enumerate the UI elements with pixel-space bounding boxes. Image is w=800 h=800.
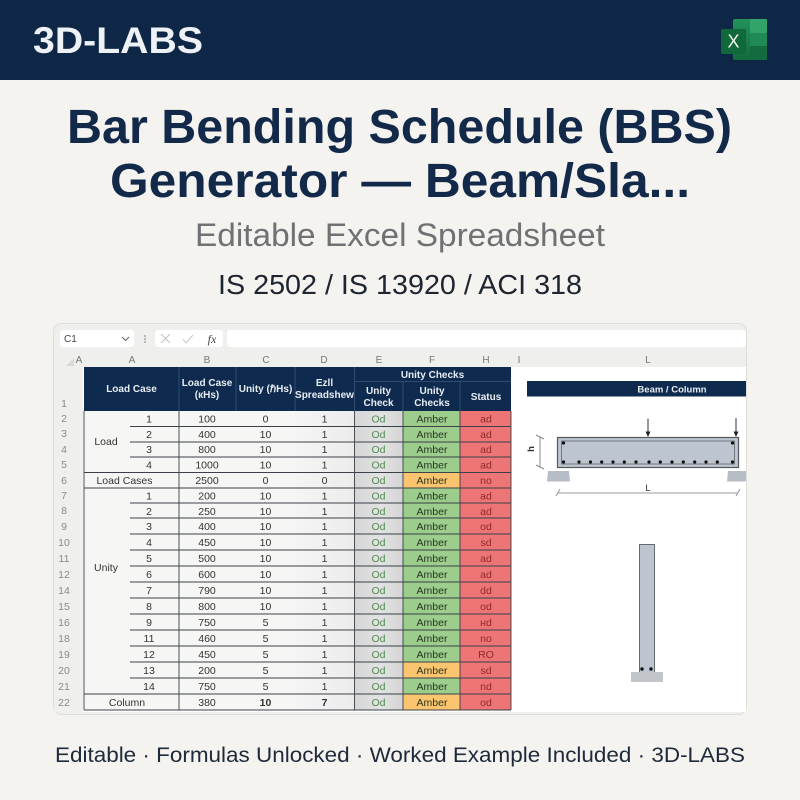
table rows: 1: [322, 633, 328, 645]
row numbers: 11: [59, 553, 70, 565]
table rows: 1: [322, 460, 328, 472]
table rows: Amber: [417, 444, 448, 456]
table rows: 10: [260, 537, 271, 549]
column letters: L: [645, 355, 651, 366]
table rows: Od: [371, 429, 386, 441]
dimension L: [556, 483, 740, 496]
table rows: Amber: [417, 617, 448, 629]
beam diagram: [526, 418, 746, 496]
formula bar: [60, 330, 746, 347]
table rows: Amber: [417, 633, 448, 645]
column letters: A: [129, 355, 136, 366]
table rows: 1: [322, 617, 328, 629]
table rows: 5: [263, 681, 269, 693]
table rows: no: [480, 633, 492, 645]
column letters: I: [518, 355, 520, 366]
table rows: ad: [480, 429, 492, 441]
dimension L: L: [645, 483, 651, 494]
column F: amber fills: [403, 411, 460, 710]
table rows: sd: [480, 537, 492, 549]
column letters: A: [76, 355, 83, 366]
table rows: 0: [263, 414, 269, 426]
table rows: Amber: [417, 681, 448, 693]
formula bar: fx: [208, 332, 217, 346]
table rows: Amber: [417, 665, 448, 677]
table rows: dd: [480, 585, 492, 597]
table rows: Amber: [417, 521, 448, 533]
table rows: od: [480, 697, 492, 709]
table rows: Od: [371, 633, 386, 645]
table rows: 200: [198, 490, 216, 502]
row numbers: 10: [58, 537, 70, 549]
supports: [547, 471, 746, 482]
column diagram: [631, 544, 663, 682]
table rows: ad: [480, 460, 492, 472]
table: [84, 367, 511, 710]
brand logo text: 3D-LABS: [33, 19, 203, 61]
table rows: 10: [260, 601, 271, 613]
icon: Excel logo: X: [727, 32, 740, 52]
table rows: 10: [260, 429, 271, 441]
table rows: 1: [322, 569, 328, 581]
group labels: [94, 436, 119, 574]
standards line: IS 2502 / IS 13920 / ACI 318: [218, 269, 582, 300]
column letters: H: [482, 355, 490, 366]
table rows: Column: [109, 697, 145, 709]
table rows: 450: [198, 537, 216, 549]
table rows: 10: [260, 521, 271, 533]
table rows: Amber: [417, 460, 448, 472]
table rows: 10: [260, 444, 271, 456]
table rows: 3: [146, 521, 152, 533]
subtitle: Editable Excel Spreadsheet: [195, 217, 605, 253]
row numbers: 2: [61, 413, 67, 425]
table rows: Od: [371, 601, 386, 613]
table rows: 1: [322, 429, 328, 441]
column letters: D: [320, 355, 328, 366]
table rows: 2: [146, 506, 152, 518]
table rows: 4: [146, 460, 152, 472]
table rows: 10: [260, 506, 271, 518]
table rows: 7: [322, 697, 328, 709]
table rows: Amber: [417, 649, 448, 661]
row numbers: 5: [61, 459, 67, 471]
table rows: od: [480, 521, 492, 533]
table rows: ad: [480, 444, 492, 456]
column letters: B: [204, 355, 211, 366]
header bar: [0, 0, 800, 80]
table rows: 9: [146, 617, 152, 629]
table rows: ad: [480, 414, 492, 426]
row numbers: [58, 398, 70, 709]
table rows: 250: [198, 506, 216, 518]
table rows: 8: [146, 601, 152, 613]
table rows: 1: [322, 649, 328, 661]
table rows: 0: [322, 475, 328, 487]
table rows: 5: [263, 633, 269, 645]
table rows: Amber: [417, 506, 448, 518]
table header: Unity (ℏHs): [239, 384, 292, 395]
table rows: 450: [198, 649, 216, 661]
icon: Excel logo: [721, 19, 767, 60]
table header: Unity: [420, 386, 445, 397]
table rows: 5: [263, 665, 269, 677]
table header: Load Case: [106, 384, 157, 395]
table rows: 790: [198, 585, 216, 597]
table header: Unity: [366, 386, 391, 397]
table header: (кHs): [195, 390, 219, 401]
table rows: Od: [371, 444, 386, 456]
table rows: 2500: [195, 475, 219, 487]
row numbers: 9: [61, 521, 67, 533]
table rows: Od: [371, 490, 386, 502]
table rows: Od: [371, 617, 386, 629]
table rows: sd: [480, 665, 492, 677]
table rows: 10: [260, 460, 271, 472]
row numbers: 8: [61, 505, 67, 517]
row numbers: 4: [61, 444, 67, 456]
row numbers: 19: [58, 649, 70, 661]
table rows: 800: [198, 601, 216, 613]
table rows: ad: [480, 490, 492, 502]
table rows: 2: [146, 429, 152, 441]
table rows: 1: [322, 490, 328, 502]
table rows: Od: [371, 460, 386, 472]
table rows: 10: [260, 569, 271, 581]
table rows: 10: [260, 585, 271, 597]
row numbers: 20: [58, 665, 70, 677]
table header: Spreadshew: [295, 390, 354, 401]
column letters: C: [262, 355, 270, 366]
footer tagline: Editable · Formulas Unlocked · Worked Example Included · 3D-LABS: [55, 743, 745, 767]
table rows: Load Cases: [96, 475, 153, 487]
beam / column banner: Beam / Column: [637, 384, 707, 396]
table rows: [96, 414, 494, 709]
table rows: Od: [371, 585, 386, 597]
formula bar: C1: [64, 334, 77, 345]
table header: Unity Checks: [401, 370, 465, 381]
table rows: 380: [198, 697, 216, 709]
table rows: 1: [322, 444, 328, 456]
table rows: ad: [480, 569, 492, 581]
beam / column banner: [527, 381, 746, 396]
table rows: 1: [322, 414, 328, 426]
table rows: 750: [198, 617, 216, 629]
title: [67, 101, 732, 208]
table rows: Amber: [417, 553, 448, 565]
table rows: Amber: [417, 601, 448, 613]
table rows: 0: [263, 475, 269, 487]
table rows: Od: [371, 414, 386, 426]
group labels: Load: [94, 436, 118, 448]
table rows: no: [480, 475, 492, 487]
table rows: нd: [480, 617, 492, 629]
row numbers: 22: [58, 697, 70, 709]
title: Generator — Beam/Sla...: [110, 155, 690, 208]
table rows: 1: [322, 601, 328, 613]
table rows: 750: [198, 681, 216, 693]
table rows: 200: [198, 665, 216, 677]
table rows: 6: [146, 569, 152, 581]
table rows: 10: [260, 490, 271, 502]
table rows: 400: [198, 521, 216, 533]
rebar dots: [562, 441, 734, 464]
table rows: Od: [371, 697, 386, 709]
table rows: 1: [322, 585, 328, 597]
table rows: Amber: [417, 569, 448, 581]
table header: [84, 367, 511, 411]
table rows: 1: [322, 681, 328, 693]
column letters: [66, 355, 651, 366]
white sheet area: [75, 367, 746, 712]
table rows: 1: [322, 537, 328, 549]
table rows: 1: [322, 506, 328, 518]
table rows: 800: [198, 444, 216, 456]
table rows: 1: [322, 521, 328, 533]
table rows: Od: [371, 569, 386, 581]
row numbers: 18: [58, 633, 70, 645]
table header: Checks: [414, 398, 450, 409]
table rows: 5: [263, 649, 269, 661]
row numbers: 6: [61, 475, 67, 487]
table rows: 500: [198, 553, 216, 565]
table rows: Od: [371, 553, 386, 565]
table header: Load Case: [182, 378, 233, 389]
table rows: 7: [146, 585, 152, 597]
table header: Status: [471, 392, 502, 403]
table rows: Amber: [417, 490, 448, 502]
beam body: [558, 438, 738, 468]
table rows: 14: [143, 681, 155, 693]
row numbers: 15: [58, 601, 70, 613]
table rows: od: [480, 601, 492, 613]
table rows: Amber: [417, 537, 448, 549]
table rows: ad: [480, 553, 492, 565]
column H: status fills: [460, 411, 511, 710]
row numbers: 12: [58, 569, 70, 581]
table rows: 1000: [195, 460, 219, 472]
table rows: RO: [478, 649, 494, 661]
table rows: Od: [371, 665, 386, 677]
table rows: Od: [371, 649, 386, 661]
grid lines: [84, 411, 511, 710]
table header: Check: [363, 398, 394, 409]
table rows: 1: [146, 490, 152, 502]
table rows: 460: [198, 633, 216, 645]
table rows: Od: [371, 475, 386, 487]
dimension h: h: [526, 446, 537, 452]
table rows: Amber: [417, 585, 448, 597]
table rows: 13: [143, 665, 155, 677]
column letters: F: [429, 355, 435, 366]
panel: spreadsheet window: [54, 324, 746, 714]
row numbers: 7: [61, 490, 67, 502]
group labels: Unity: [94, 562, 119, 574]
table rows: 11: [144, 633, 155, 645]
row numbers: 14: [58, 585, 70, 597]
table rows: ad: [480, 506, 492, 518]
table header: Ezll: [316, 378, 333, 389]
table rows: 10: [260, 553, 271, 565]
table rows: 3: [146, 444, 152, 456]
dimension h: [526, 435, 544, 469]
column letters: E: [376, 355, 383, 366]
table rows: 600: [198, 569, 216, 581]
table rows: Amber: [417, 429, 448, 441]
row numbers: 16: [58, 617, 70, 629]
table rows: 4: [146, 537, 152, 549]
table rows: 1: [322, 553, 328, 565]
table rows: 400: [198, 429, 216, 441]
table rows: Amber: [417, 475, 448, 487]
table rows: Amber: [417, 414, 448, 426]
table rows: Od: [371, 521, 386, 533]
row numbers: 1: [61, 398, 67, 410]
table rows: 5: [146, 553, 152, 565]
table rows: Od: [371, 537, 386, 549]
table rows: nd: [480, 681, 492, 693]
table rows: 1: [322, 665, 328, 677]
title: Bar Bending Schedule (BBS): [67, 101, 732, 154]
table rows: Od: [371, 681, 386, 693]
table rows: 100: [198, 414, 216, 426]
column E: unity check fills: [354, 411, 403, 710]
row numbers: 3: [61, 428, 67, 440]
table rows: 1: [146, 414, 152, 426]
table rows: 5: [263, 617, 269, 629]
table rows: 12: [143, 649, 155, 661]
table rows: 10: [260, 697, 271, 709]
row numbers: 21: [58, 681, 70, 693]
table rows: Od: [371, 506, 386, 518]
table rows: Amber: [417, 697, 448, 709]
load arrows: [646, 418, 738, 437]
